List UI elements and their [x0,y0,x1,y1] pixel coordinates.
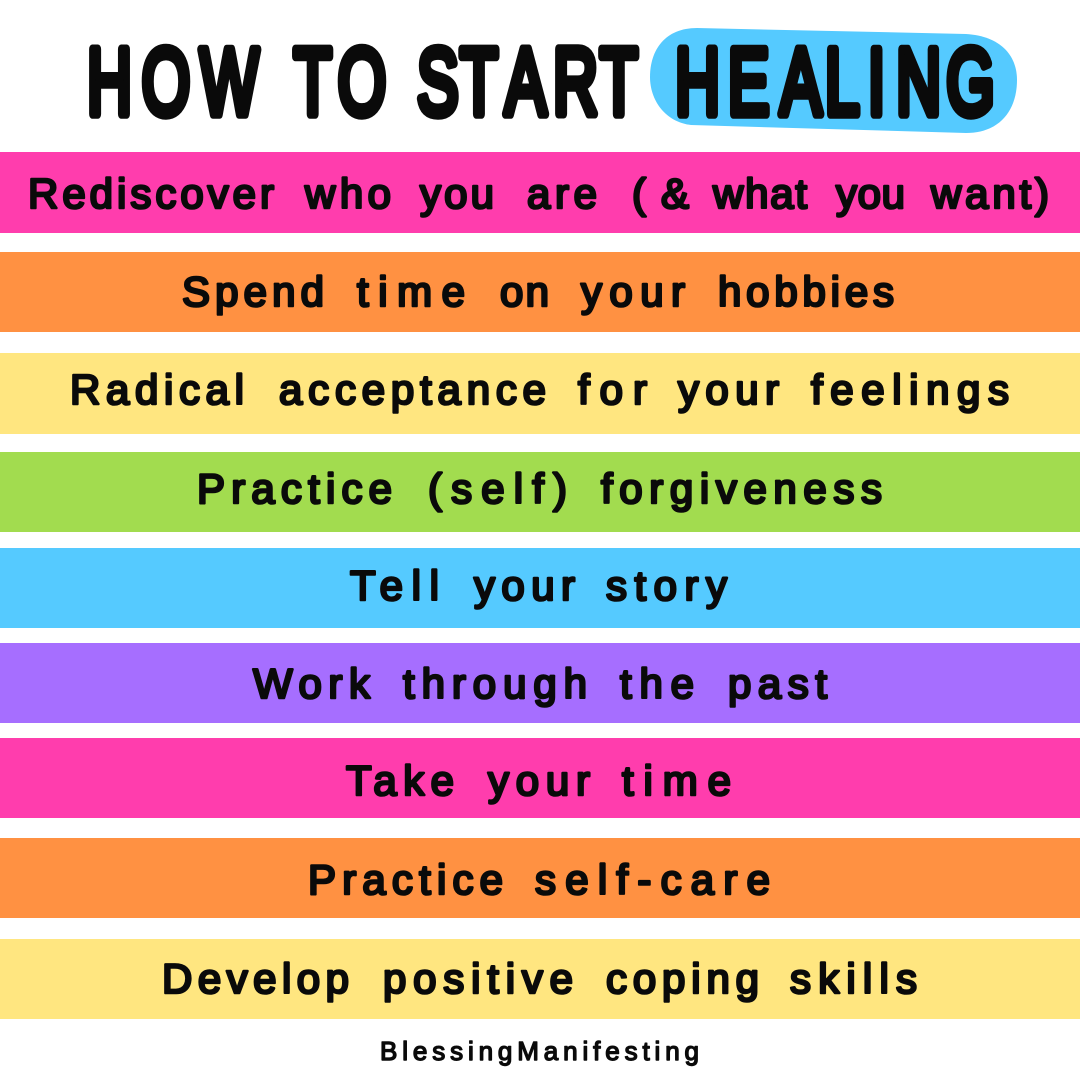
item 6: through [403,660,587,707]
item 3: your [678,366,779,413]
item 8: Practice [308,856,503,903]
item 7 [0,738,1080,818]
item 2 [0,252,1080,332]
item 6: the [620,660,694,707]
item 8 [0,838,1080,918]
item 7: time [622,757,731,804]
item 4: Practice [197,465,392,512]
item 7: Take [346,757,454,804]
title text: how to start: HOW TO START [87,29,638,134]
item 7: your [488,757,590,804]
item 2: hobbies [718,268,894,315]
title text: healing: HEALING [675,29,995,134]
item 9 [0,939,1080,1019]
item 5: Tell [350,562,439,609]
item 4: forgiveness [601,465,882,512]
item 8: self-care [535,856,770,903]
item 1: you [836,170,905,217]
item 1: (& [632,170,689,217]
item 3: acceptance [279,366,546,413]
item 1 [0,152,1080,233]
item 9: Develop [162,955,349,1002]
item 2: time [357,268,465,315]
item 3: Radical [70,366,244,413]
item 3: feelings [811,366,1009,413]
item 1: you [420,170,494,217]
item 1: what [712,170,807,217]
item 4: (self) [428,465,567,512]
item 6 [0,643,1080,723]
item 3 [0,353,1080,434]
item 2: your [581,268,685,315]
item 3: for [578,366,647,413]
item 4 [0,452,1080,532]
item 1: Rediscover [28,170,274,217]
item 5: your [474,562,575,609]
item 9: skills [790,955,917,1002]
item 1: are [527,170,597,217]
item 1: who [304,170,391,217]
title [87,28,1017,134]
item 2: Spend [182,268,324,315]
item 5 [0,548,1080,628]
item 6: past [728,660,827,707]
item 5: story [606,562,727,609]
title highlight pill [650,28,1017,133]
item 1: want) [930,170,1049,217]
footer credit: BlessingManifesting [380,1036,699,1066]
item 9: positive [383,955,573,1002]
item 2: on [500,268,549,315]
item 6: Work [253,660,371,707]
item 9: coping [606,955,759,1002]
